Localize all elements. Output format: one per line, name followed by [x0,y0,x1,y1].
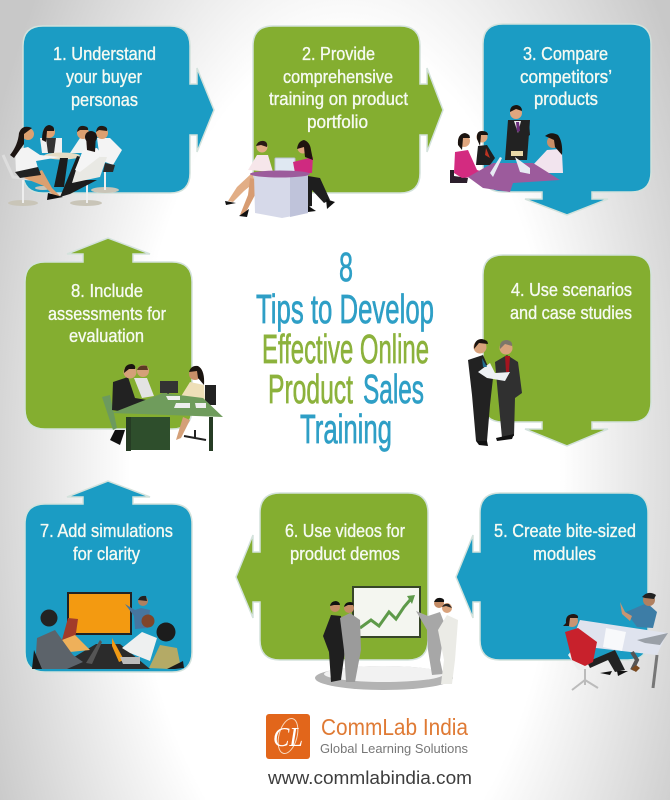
step 1 text: 1. Understand [53,44,156,64]
arrow box 4 [483,255,651,446]
step 3 text: products [534,89,598,109]
logo: CommLab India [266,714,468,759]
panel: step 5 [456,493,648,660]
title: Product [268,366,353,412]
arrow box 1 [23,26,214,193]
step 1 text: personas [71,90,138,110]
step 2 text: training on product [269,89,408,109]
step 8 text: evaluation [69,326,144,346]
illustration: group comparing products at table [450,105,563,192]
step 5 text [494,521,636,564]
illustration: two businessmen reading a document [468,339,522,446]
panel: step 3 [483,24,651,215]
illustration: meeting at green desk [102,364,223,451]
arrow box 5 [456,493,648,660]
step 3 text: 3. Compare [523,44,608,64]
step 1 text [53,44,156,110]
panel: step 7 [25,481,192,672]
step 8 text: 8. Include [71,281,143,301]
website url: www.commlabindia.com [267,767,472,788]
title: Effective Online [262,326,429,372]
title: Sales [363,366,424,412]
title: Tips to Develop [256,286,434,332]
step 8 text: assessments for [48,304,166,324]
step 4 text [510,280,632,323]
illustration: women at desk with laptop [225,140,335,218]
step 4 text: 4. Use scenarios [511,280,632,300]
illustration: team meeting around table [3,125,122,206]
step 3 text: competitors’ [520,67,612,87]
step 3 text [520,44,612,109]
step 8 text [48,281,166,346]
panel: step 8 [25,238,192,429]
step 7 text: for clarity [73,544,140,564]
step 2 text: 2. Provide [302,44,375,64]
step 2 text [269,44,408,132]
step 2 text: portfolio [307,112,368,132]
title: Training [300,406,392,452]
logo tagline: Global Learning Solutions [320,741,468,756]
illustration: presentation room with orange screen [32,593,184,669]
arrow box 3 [483,24,651,215]
step 1 text: your buyer [66,67,142,87]
arrow box 6 [236,493,428,660]
step 6 text: 6. Use videos for [285,521,405,541]
illustration: team reviewing growth chart [315,587,458,690]
step 6 text [285,521,405,564]
step 5 text: modules [533,544,596,564]
panel: step 6 [236,493,428,660]
panel: step 1 [23,26,214,193]
arrow box 2 [253,26,443,193]
arrow box 7 [25,481,192,672]
step 7 text [40,521,173,564]
panel: step 2 [253,26,443,193]
title [256,244,434,452]
title: 8 [339,244,353,290]
step 5 text: 5. Create bite-sized [494,521,636,541]
step 2 text: comprehensive [283,67,393,87]
logo name: CommLab India [321,714,468,740]
panel: step 4 [483,255,651,446]
step 6 text: product demos [290,544,400,564]
illustration: two people talking across a table [563,593,668,690]
step 4 text: and case studies [510,303,632,323]
logo icon [266,714,310,759]
logo icon: CL [273,722,303,752]
step 7 text: 7. Add simulations [40,521,173,541]
arrow box 8 [25,238,192,429]
